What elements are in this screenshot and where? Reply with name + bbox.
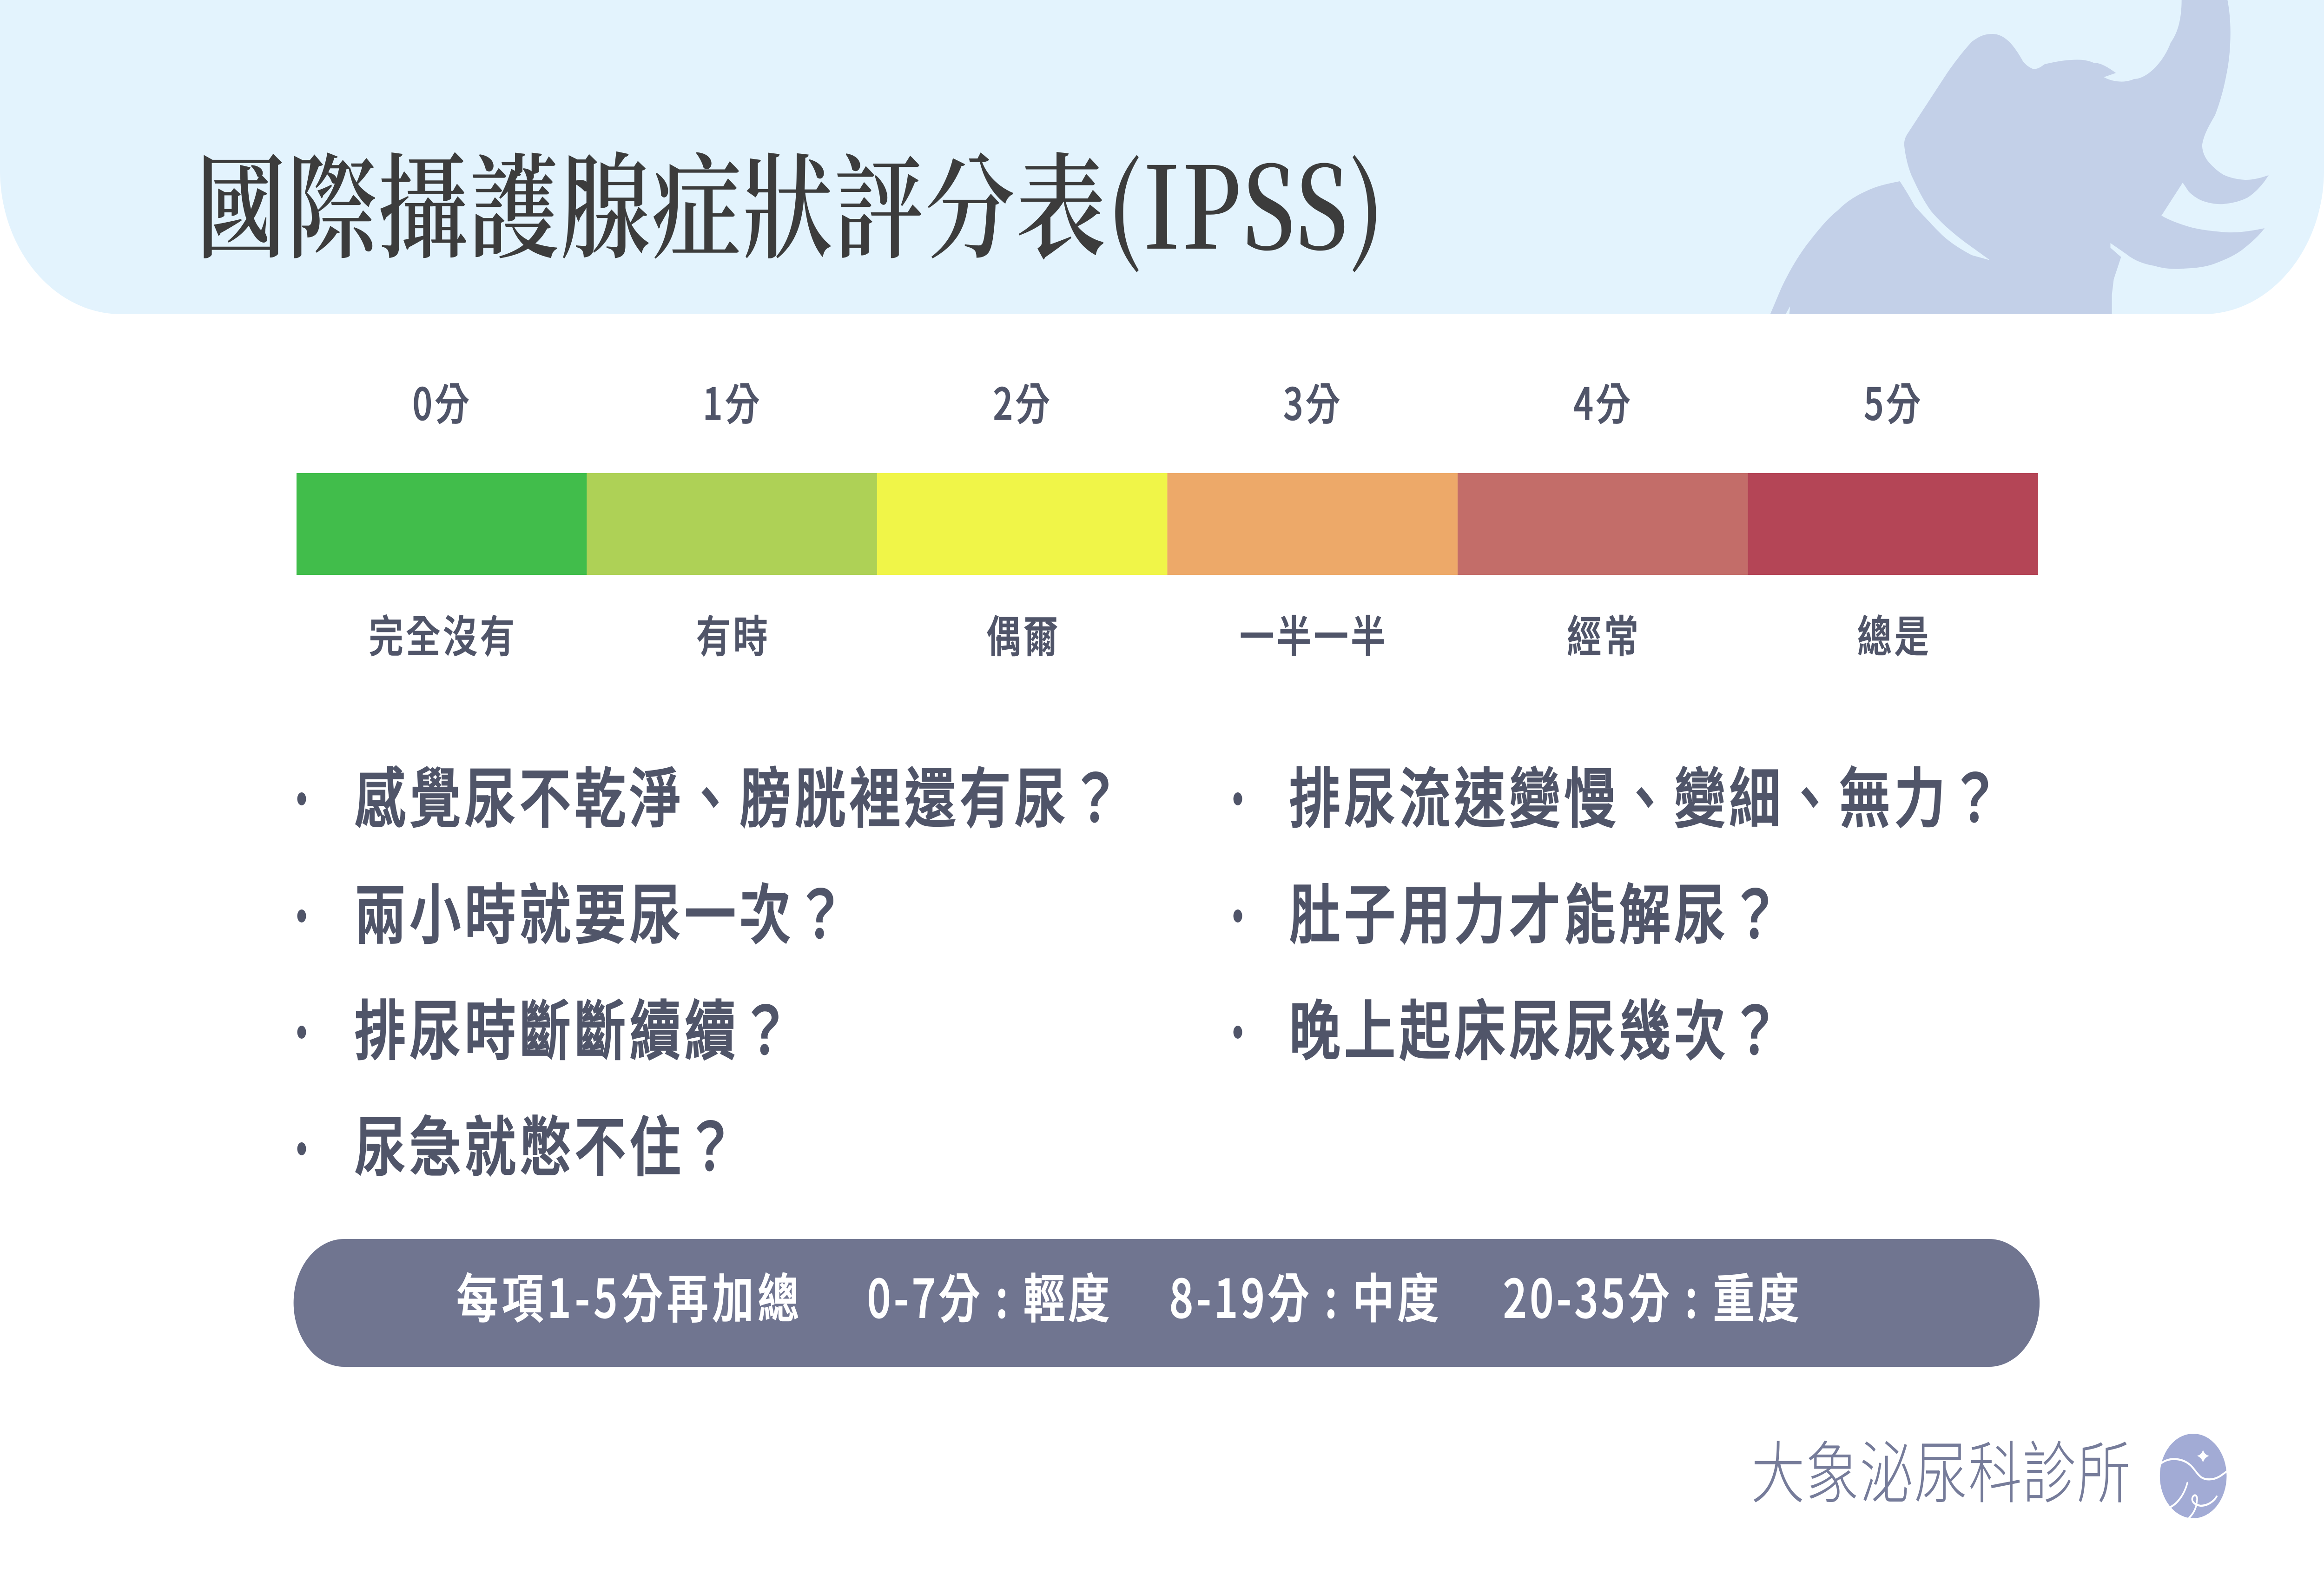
severity scale: frequency labels: 偶爾 (986, 602, 1061, 665)
severity scale: score labels: 3分 (1283, 369, 1343, 433)
header banner (0, 0, 2324, 314)
severity scale: score labels (413, 369, 1923, 433)
scoring summary text (456, 1257, 1802, 1333)
scoring summary text: 20-35分 : 重度 (1503, 1257, 1802, 1333)
severity scale: frequency labels: 完全沒有 (369, 602, 517, 665)
severity scale: frequency labels (369, 602, 1931, 665)
symptom list: left column: 感覺尿不乾淨、膀胱裡還有尿？ (355, 747, 1124, 841)
severity scale: score labels: 4分 (1574, 369, 1633, 433)
severity scale: score labels: 0分 (413, 369, 472, 433)
severity scale: score labels: 1分 (703, 369, 762, 433)
symptom list: right column: 排尿流速變慢、變細、無力？ (1289, 747, 2004, 841)
symptom list: right column (1234, 747, 2004, 1073)
scoring summary text: 每項1-5分再加總 (456, 1257, 803, 1333)
severity scale: frequency labels: 經常 (1567, 602, 1641, 665)
scoring summary text: 0-7分 : 輕度 (867, 1257, 1113, 1333)
icon: elephant silhouette (1770, 0, 2269, 314)
title: 國際攝護腺症狀評分表(IPSS) (196, 118, 1386, 282)
severity scale: colour bar (297, 473, 2038, 575)
symptom list: left column: 尿急就憋不住？ (355, 1095, 739, 1189)
severity scale: frequency labels: 有時 (696, 602, 770, 665)
symptom list: left column (297, 747, 1124, 1189)
scoring summary text: 8-19分 : 中度 (1169, 1257, 1442, 1333)
symptom list: right column: 肚子用力才能解尿？ (1289, 863, 1784, 957)
severity scale: frequency labels: 總是 (1857, 602, 1931, 665)
clinic name: 大象泌尿科診所 (1751, 1418, 2131, 1517)
severity scale: score labels: 2分 (993, 369, 1052, 433)
icon: clinic logo (2160, 1434, 2226, 1518)
symptom list: left column: 排尿時斷斷續續？ (355, 979, 794, 1073)
symptom list: right column: 晚上起床尿尿幾次？ (1289, 979, 1784, 1073)
scoring summary pill (294, 1239, 2040, 1367)
severity scale: frequency labels: 一半一半 (1240, 602, 1388, 665)
symptom list: left column: 兩小時就要尿一次？ (355, 863, 850, 957)
severity scale: score labels: 5分 (1864, 369, 1923, 433)
